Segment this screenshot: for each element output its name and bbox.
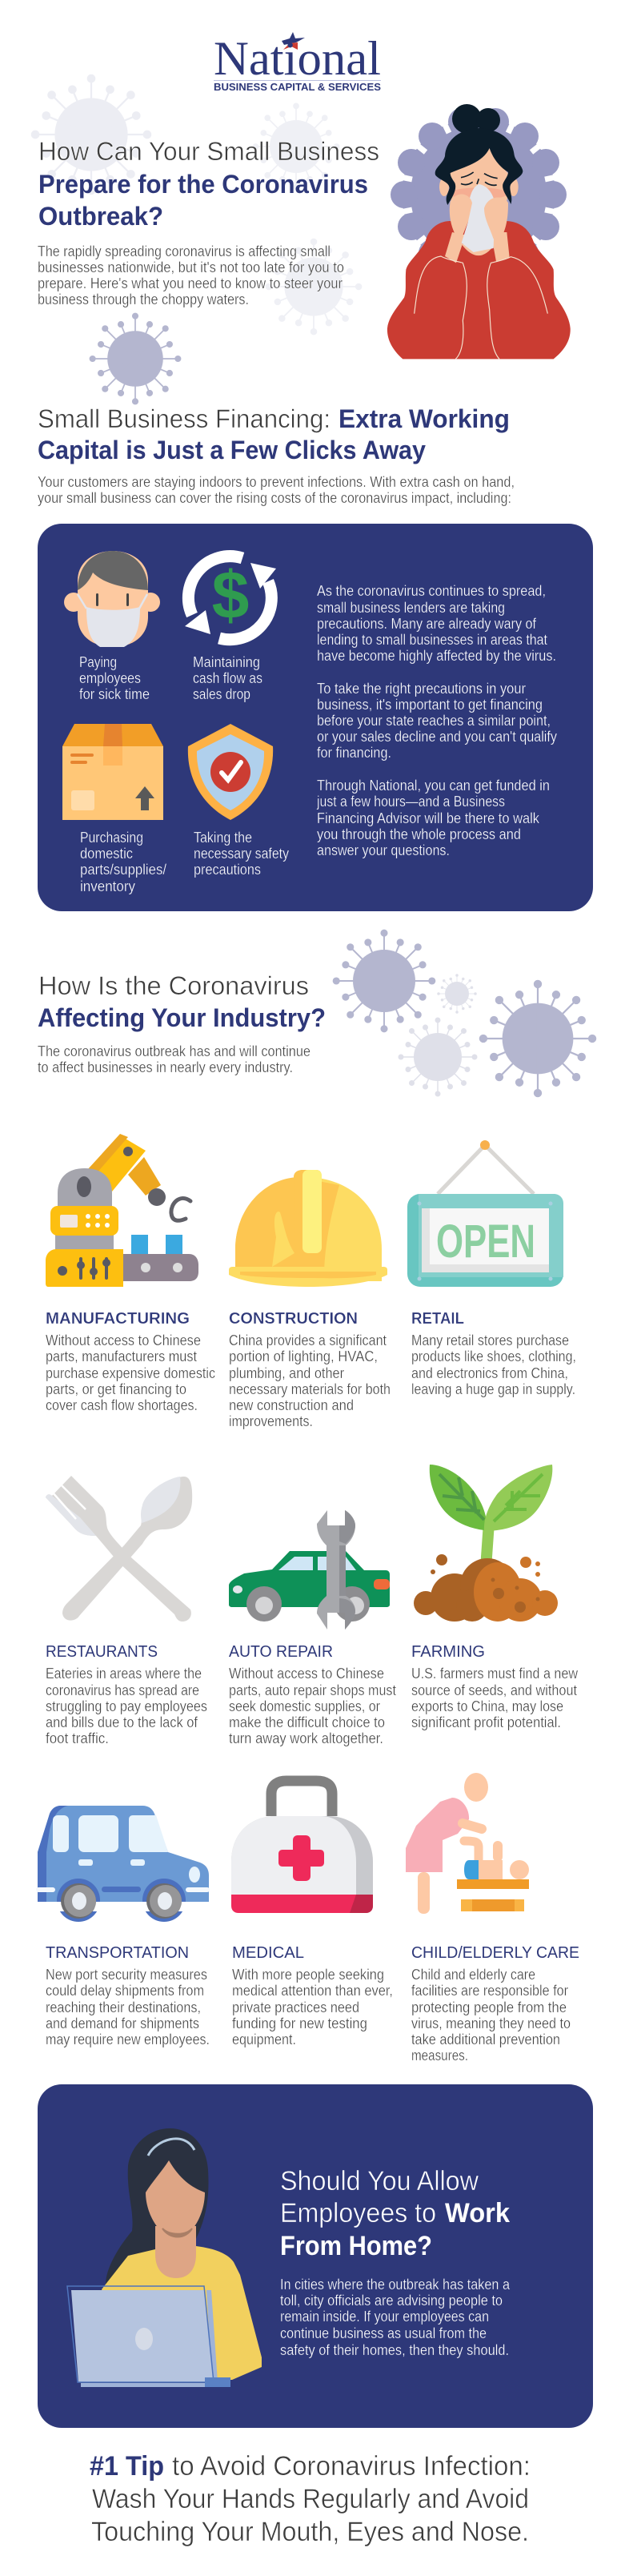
block: construction: CONSTRUCTION <box>229 1310 358 1328</box>
block: retail: RETAIL <box>411 1310 464 1328</box>
intro text: businesses nationwide, but it's not too late for you to <box>38 259 344 275</box>
label: purchasing: parts/supplies/ <box>80 862 166 878</box>
icon: caregiver and child <box>406 1773 529 1914</box>
label: purchasing: Purchasing <box>80 830 143 846</box>
heading: small business financing: Small Business Financing: <box>38 404 331 433</box>
icon: cardboard box <box>62 724 163 820</box>
industry intro text <box>38 1043 310 1075</box>
text: work from home advice: remain inside. If your employees can <box>280 2309 489 2325</box>
logo: National Business Capital & Services: National <box>214 32 381 85</box>
heading: industry impact: How Is the Coronavirus <box>38 971 309 1000</box>
block: medical <box>232 1944 393 2048</box>
block: manufacturing: purchase expensive domestic <box>46 1365 215 1381</box>
text: lender precautions: small business lenders are taking <box>317 600 505 616</box>
text: work from home advice <box>280 2277 511 2358</box>
block: retail: and electronics from China, <box>411 1365 568 1381</box>
text: lender precautions <box>316 583 557 858</box>
icon: person wearing mask <box>64 551 160 647</box>
text: lender precautions: As the coronavirus continues to spread, <box>317 583 546 599</box>
text: lender precautions: for financing. <box>317 745 391 761</box>
heading: industry impact <box>38 971 326 1032</box>
block: transportation: and demand for shipments <box>46 2015 199 2031</box>
label: maintaining cash flow: Maintaining <box>193 654 260 670</box>
icon: pale virus mid right <box>269 242 359 332</box>
text: lender precautions: business, it's important to get financing <box>317 697 543 713</box>
heading: work from home: Employees to <box>280 2198 436 2228</box>
closing tip: Wash Your Hands Regularly and Avoid <box>92 2484 529 2514</box>
block: construction <box>229 1310 391 1429</box>
icon: pale virus top centre <box>255 106 337 187</box>
text: lender precautions: have become highly affected by the virus. <box>317 648 556 664</box>
label: purchasing: domestic <box>80 846 133 862</box>
block: retail: leaving a huge gap in supply. <box>411 1381 575 1397</box>
label: safety precautions: precautions <box>194 862 261 878</box>
block: retail: Many retail stores purchase <box>411 1332 569 1348</box>
label: purchasing <box>80 830 166 894</box>
illustration: sick woman with tissue <box>387 102 571 359</box>
title: How Can Your Small Business <box>38 137 379 166</box>
title: Outbreak? <box>38 202 163 231</box>
icon: pale virus top left <box>35 78 147 191</box>
closing tip <box>90 2451 531 2547</box>
icon: open sign: OPEN <box>436 1216 535 1268</box>
block: child and elderly care: protecting people from the <box>411 1999 567 2015</box>
block: medical: With more people seeking <box>232 1967 384 1983</box>
closing tip: Touching Your Mouth, Eyes and Nose. <box>91 2517 529 2547</box>
heading: industry impact: Affecting Your Industry? <box>38 1003 326 1032</box>
label: safety precautions: necessary safety <box>194 846 289 862</box>
text: lender precautions: just a few hours—and a Business <box>316 794 505 810</box>
intro text: business through the choppy waters. <box>38 291 249 307</box>
block: construction: necessary materials for both <box>229 1381 391 1397</box>
industry intro text: to affect businesses in nearly every industry. <box>38 1059 293 1075</box>
icon: medical kit <box>231 1781 373 1913</box>
text: lender precautions: lending to small businesses in areas that <box>317 632 547 648</box>
financing intro text: Your customers are staying indoors to prevent infections. With extra cash on hand, <box>38 474 515 490</box>
block: child and elderly care: virus, meaning they need to <box>411 2015 571 2031</box>
block: construction: China provides a significant <box>229 1332 387 1348</box>
text: lender precautions: precautions. Many are already wary of <box>317 616 537 632</box>
block: child and elderly care: measures. <box>411 2048 468 2064</box>
text: lender precautions: or your sales decline and you can't qualify <box>317 729 557 745</box>
block: child and elderly care: take additional prevention <box>411 2031 560 2048</box>
block: farming <box>411 1643 579 1730</box>
block: transportation: could delay shipments from <box>46 1983 204 1999</box>
block: farming: significant profit potential. <box>411 1714 561 1730</box>
icon: large virus halo <box>389 102 568 287</box>
title: Prepare for the Coronavirus <box>38 170 368 199</box>
block: transportation <box>46 1944 210 2048</box>
panel: working capital uses <box>38 524 593 911</box>
block: restaurants: and bills due to the lack of <box>46 1714 198 1730</box>
icon: circular cash flow arrows: $ <box>212 557 249 633</box>
label: purchasing: inventory <box>80 878 135 894</box>
label: paying employees: for sick time <box>79 686 150 702</box>
block: manufacturing: parts, or get financing to <box>46 1381 186 1397</box>
block: medical: medical attention than ever, <box>232 1983 393 1999</box>
block: restaurants: struggling to pay employees <box>46 1698 207 1714</box>
block: child and elderly care <box>411 1944 579 2064</box>
financing intro text: your small business can cover the rising costs of the coronavirus impact, including: <box>38 490 511 506</box>
block: auto repair: seek domestic supplies, or <box>229 1698 380 1714</box>
figure: woman <box>387 104 571 359</box>
block: restaurants <box>46 1643 207 1746</box>
label: safety precautions: Taking the <box>194 830 252 846</box>
heading: small business financing: Extra Working <box>339 404 510 433</box>
label: maintaining cash flow: cash flow as <box>193 670 262 686</box>
icon: open sign <box>407 1140 563 1287</box>
block: farming: source of seeds, and without <box>411 1682 577 1698</box>
block: manufacturing <box>46 1310 215 1413</box>
heading: work from home: From Home? <box>280 2231 432 2261</box>
block: auto repair <box>229 1643 396 1746</box>
icon: car and wrench <box>229 1510 390 1630</box>
block: construction: portion of lighting, HVAC, <box>229 1348 378 1364</box>
logo: National Business Capital & Services: BUSINESS CAPITAL & SERVICES <box>214 82 381 93</box>
icon: robot arm manufacturing <box>46 1134 198 1287</box>
text: lender precautions: To take the right precautions in your <box>317 681 526 697</box>
text: work from home advice: safety of their homes, then they should. <box>280 2342 509 2358</box>
icon: fork and spoon <box>46 1476 192 1622</box>
block: child and elderly care: facilities are responsible for <box>411 1983 568 1999</box>
block: medical: equipment. <box>232 2031 296 2048</box>
title <box>38 137 379 231</box>
icon: virus cluster <box>336 933 592 1094</box>
label: paying employees: employees <box>79 670 141 686</box>
financing intro text <box>38 474 515 506</box>
text: lender precautions: before your state reaches a similar point, <box>317 713 551 729</box>
block: auto repair: turn away work altogether. <box>229 1730 383 1746</box>
heading: work from home: Work <box>445 2198 510 2228</box>
block: construction: plumbing, and other <box>229 1365 344 1381</box>
block: medical: MEDICAL <box>232 1944 304 1962</box>
block: transportation: TRANSPORTATION <box>46 1944 189 1962</box>
icon: safety shield <box>188 724 273 820</box>
label: paying employees <box>79 654 150 702</box>
block: auto repair: parts, auto repair shops must <box>229 1682 396 1698</box>
block: farming: FARMING <box>411 1643 485 1661</box>
icon: hard hat <box>229 1170 387 1287</box>
block: retail: products like shoes, clothing, <box>411 1348 576 1364</box>
block: manufacturing: cover cash flow shortages. <box>46 1397 198 1413</box>
block: medical: funding for new testing <box>232 2015 367 2031</box>
icon: plant in soil <box>414 1465 558 1622</box>
closing tip: #1 Tip <box>90 2451 164 2482</box>
block: manufacturing: MANUFACTURING <box>46 1310 190 1328</box>
intro text: prepare. Here's what you need to know to steer your <box>38 275 343 291</box>
icon: grey virus below intro <box>93 316 178 401</box>
block: transportation: New port security measures <box>46 1967 207 1983</box>
block: manufacturing: Without access to Chinese <box>46 1332 201 1348</box>
text: lender precautions: you through the whole process and <box>317 826 521 842</box>
icon: circular cash flow arrows <box>185 557 276 640</box>
block: restaurants: coronavirus has spread are <box>46 1682 199 1698</box>
block: auto repair: make the difficult choice to <box>229 1714 385 1730</box>
icon: blue van <box>36 1806 210 1922</box>
heading: small business financing <box>38 404 510 464</box>
block: child and elderly care: CHILD/ELDERLY CARE <box>411 1944 579 1962</box>
block: restaurants: RESTAURANTS <box>46 1643 158 1661</box>
block: transportation: may require new employees. <box>46 2031 210 2048</box>
block: transportation: reaching their destinations, <box>46 1999 201 2015</box>
intro text <box>38 243 344 307</box>
text: work from home advice: toll, city officials are advising people to <box>280 2293 503 2309</box>
panel: work from home <box>38 2084 593 2428</box>
label: maintaining cash flow <box>193 654 262 702</box>
block: medical: private practices need <box>232 1999 359 2015</box>
label: safety precautions <box>194 830 289 878</box>
illustration: woman on laptop <box>67 2128 262 2387</box>
text: work from home advice: In cities where the outbreak has taken a <box>280 2277 511 2293</box>
block: auto repair: AUTO REPAIR <box>229 1643 333 1661</box>
text: lender precautions: Through National, you can get funded in <box>317 778 550 794</box>
closing tip: to Avoid Coronavirus Infection: <box>172 2451 531 2482</box>
block: farming: exports to China, may lose <box>411 1698 563 1714</box>
intro text: The rapidly spreading coronavirus is affecting small <box>38 243 331 259</box>
heading: small business financing: Capital is Just a Few Clicks Away <box>38 436 426 464</box>
block: auto repair: Without access to Chinese <box>229 1666 384 1682</box>
block: restaurants: Eateries in areas where the <box>46 1666 202 1682</box>
industry intro text: The coronavirus outbreak has and will continue <box>38 1043 310 1059</box>
block: construction: new construction and <box>229 1397 354 1413</box>
block: manufacturing: parts, manufacturers must <box>46 1348 197 1364</box>
block: restaurants: foot traffic. <box>46 1730 109 1746</box>
block: retail <box>411 1310 576 1397</box>
block: construction: improvements. <box>229 1413 313 1429</box>
heading: work from home <box>280 2166 510 2261</box>
text: lender precautions: Financing Advisor will be there to walk <box>317 810 540 826</box>
block: farming: U.S. farmers must find a new <box>411 1666 579 1682</box>
text: work from home advice: continue business as usual from the <box>280 2325 487 2341</box>
heading: work from home: Should You Allow <box>280 2166 479 2196</box>
block: child and elderly care: Child and elderly care <box>411 1967 535 1983</box>
text: lender precautions: answer your questions. <box>317 842 450 858</box>
label: paying employees: Paying <box>79 654 117 670</box>
label: maintaining cash flow: sales drop <box>193 686 250 702</box>
